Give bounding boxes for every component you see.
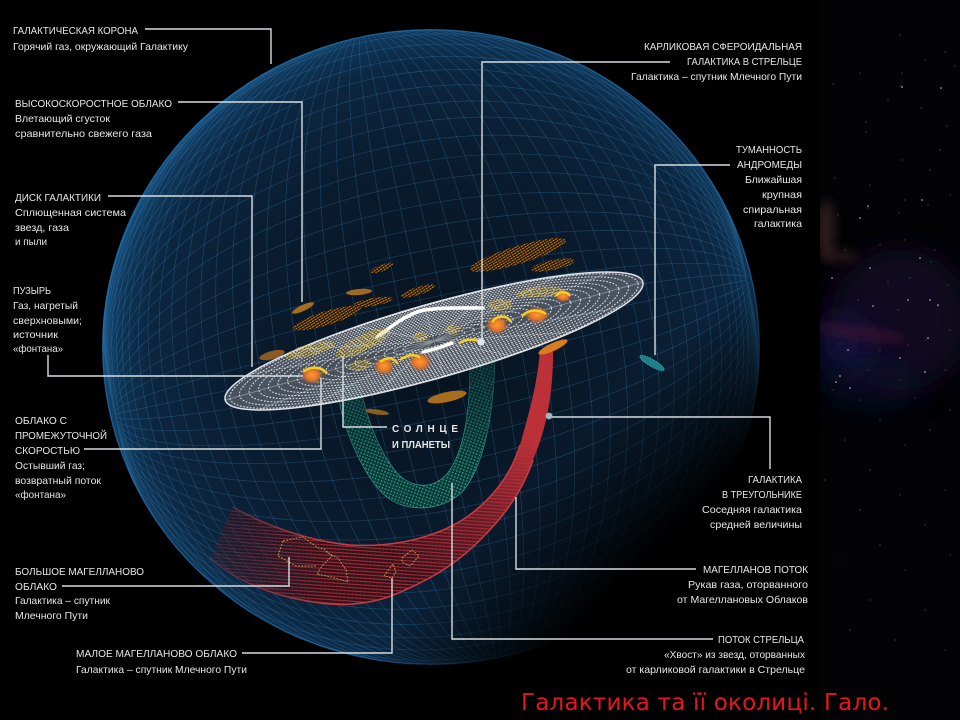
Magellanic stream bbox=[210, 350, 553, 604]
label: Sagittarius stream: ПОТОК СТРЕЛЬЦА bbox=[718, 634, 804, 646]
label: Large Magellanic Cloud bbox=[15, 566, 144, 622]
label: bubble: ПУЗЫРЬ bbox=[13, 285, 51, 297]
label: galactic disk: и пыли bbox=[15, 236, 47, 248]
label: Magellanic stream: Рукав газа, оторванного bbox=[688, 579, 808, 591]
marker: Sagittarius dwarf bbox=[477, 338, 485, 346]
label: bubble: «фонтана» bbox=[13, 343, 63, 355]
label: Magellanic stream: МАГЕЛЛАНОВ ПОТОК bbox=[703, 564, 809, 576]
Large Magellanic Cloud bbox=[278, 537, 348, 582]
label: Magellanic stream bbox=[677, 564, 809, 606]
label: Triangulum galaxy: В ТРЕУГОЛЬНИКЕ bbox=[722, 489, 802, 501]
label: Andromeda nebula: галактика bbox=[754, 218, 802, 230]
panel: galactic corona sphere bbox=[101, 5, 761, 689]
label: bubble: источник bbox=[13, 329, 58, 341]
caption: Галактика та її околиці. Гало. bbox=[521, 690, 889, 716]
galactic disk bbox=[224, 271, 644, 411]
label: Large Magellanic Cloud: ОБЛАКО bbox=[15, 581, 57, 593]
label: Sun and planets bbox=[392, 424, 458, 451]
label: intermediate-velocity cloud: СКОРОСТЬЮ bbox=[15, 445, 80, 457]
label: Large Magellanic Cloud: БОЛЬШОЕ МАГЕЛЛАНОВО bbox=[15, 566, 144, 578]
label: intermediate-velocity cloud: «фонтана» bbox=[15, 489, 66, 501]
label: Sagittarius dwarf galaxy: ГАЛАКТИКА В СТРЕЛЬЦЕ bbox=[687, 56, 802, 68]
label: Andromeda nebula: АНДРОМЕДЫ bbox=[737, 159, 802, 171]
label: Sun and planets: СОЛНЦЕ bbox=[392, 424, 458, 435]
yellow star-forming regions bbox=[283, 285, 564, 372]
label: Small Magellanic Cloud: Галактика – спутник Млечного Пути bbox=[76, 664, 247, 676]
label: galactic corona: ГАЛАКТИЧЕСКАЯ КОРОНА bbox=[13, 25, 138, 37]
label: Sagittarius stream: от карликовой галактики в Стрельце bbox=[626, 664, 805, 676]
label: galactic corona bbox=[13, 25, 189, 53]
label: Andromeda nebula bbox=[736, 144, 802, 230]
label: Andromeda nebula: ТУМАННОСТЬ bbox=[736, 144, 802, 156]
label: high-velocity cloud: ВЫСОКОСКОРОСТНОЕ ОБЛАКО bbox=[15, 98, 172, 110]
label: Sun and planets: И ПЛАНЕТЫ bbox=[392, 440, 450, 451]
panel: star field with nebula bbox=[820, 34, 960, 650]
label: high-velocity cloud: сравнительно свежего газа bbox=[15, 128, 152, 140]
label: Triangulum galaxy: ГАЛАКТИКА bbox=[748, 474, 802, 486]
label: galactic disk: звезд, газа bbox=[15, 222, 69, 234]
label: high-velocity cloud bbox=[15, 98, 172, 140]
label: Small Magellanic Cloud bbox=[76, 648, 247, 676]
label: bubble: Газ, нагретый bbox=[13, 300, 78, 312]
label: intermediate-velocity cloud: возвратный поток bbox=[15, 475, 101, 487]
label: bubble bbox=[13, 285, 82, 355]
Small Magellanic Cloud bbox=[384, 550, 419, 578]
label: Sagittarius stream bbox=[626, 634, 806, 676]
label: Andromeda nebula: крупная bbox=[762, 189, 802, 201]
marker: Triangulum galaxy bbox=[546, 413, 552, 419]
label: Sagittarius dwarf galaxy: Галактика – спутник Млечного Пути bbox=[631, 71, 802, 83]
label: Andromeda nebula: спиральная bbox=[743, 204, 802, 216]
label: intermediate-velocity cloud: ПРОМЕЖУТОЧНОЙ bbox=[15, 429, 107, 442]
label: Sagittarius dwarf galaxy bbox=[631, 41, 802, 83]
superheated bubbles bbox=[301, 290, 571, 384]
label: Triangulum galaxy: Соседняя галактика bbox=[702, 504, 802, 516]
label: intermediate-velocity cloud bbox=[15, 415, 107, 501]
label: intermediate-velocity cloud: ОБЛАКО С bbox=[15, 415, 67, 427]
label: galactic corona: Горячий газ, окружающий Галактику bbox=[13, 41, 189, 53]
label: bubble: сверхновыми; bbox=[13, 315, 82, 327]
label: Large Magellanic Cloud: Галактика – спутник bbox=[15, 595, 110, 607]
high-velocity gas clouds bbox=[258, 232, 576, 416]
label: Sagittarius dwarf galaxy: КАРЛИКОВАЯ СФЕРОИДАЛЬНАЯ bbox=[644, 41, 802, 53]
label: Triangulum galaxy bbox=[702, 474, 802, 531]
label: Andromeda nebula: Ближайшая bbox=[745, 174, 802, 186]
label: galactic disk: Сплющенная система bbox=[15, 207, 126, 219]
label: high-velocity cloud: Влетающий сгусток bbox=[15, 113, 110, 125]
label: galactic disk: ДИСК ГАЛАКТИКИ bbox=[15, 192, 101, 204]
label: Small Magellanic Cloud: МАЛОЕ МАГЕЛЛАНОВО ОБЛАКО bbox=[76, 648, 237, 660]
Andromeda nebula bbox=[638, 353, 666, 373]
Sagittarius stream bbox=[336, 355, 495, 508]
galactic bulge bbox=[377, 308, 483, 337]
label: intermediate-velocity cloud: Остывший газ; bbox=[15, 460, 85, 472]
label: galactic disk bbox=[15, 192, 126, 248]
label: Large Magellanic Cloud: Млечного Пути bbox=[15, 610, 88, 622]
label: Triangulum galaxy: средней величины bbox=[710, 519, 802, 531]
label: Magellanic stream: от Магеллановых Облаков bbox=[677, 594, 808, 606]
leader lines bbox=[48, 29, 770, 653]
label: Sagittarius stream: «Хвост» из звезд, оторванных bbox=[664, 649, 806, 661]
